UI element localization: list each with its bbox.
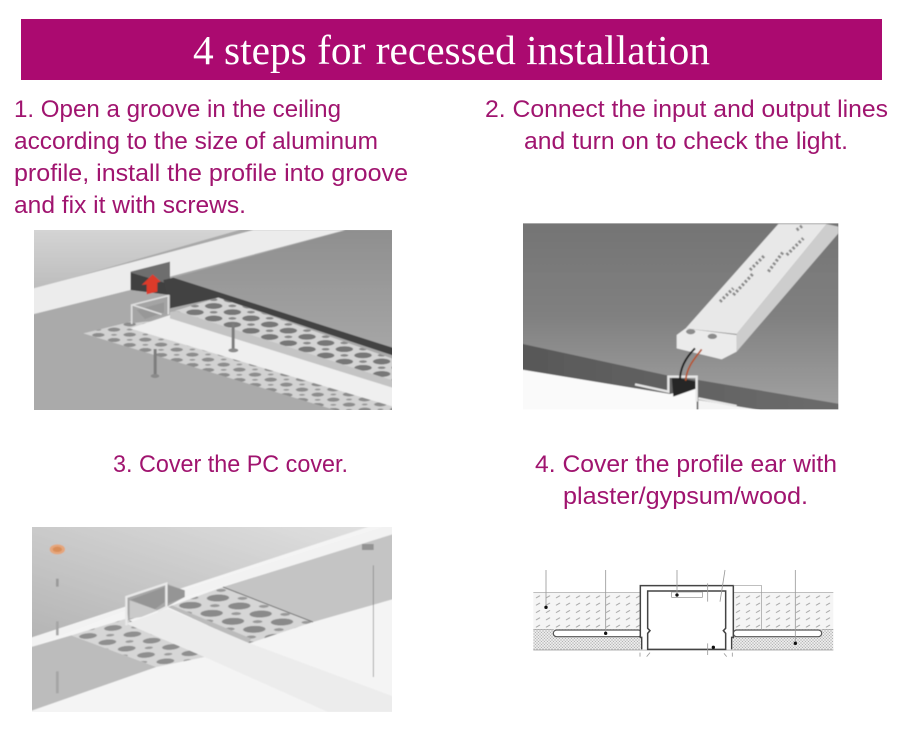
step 1 text [14, 96, 408, 219]
step 2 illustration [520, 220, 840, 413]
step 1 text: according to the size of aluminum [14, 128, 378, 155]
step 1 text: profile, install the profile into groove [14, 160, 408, 187]
step 2 text: and turn on to check the light. [524, 128, 848, 155]
step 1 illustration [30, 225, 397, 415]
step 4 text [535, 451, 837, 510]
step 3 text: 3. Cover the PC cover. [113, 451, 348, 478]
title: 4 steps for recessed installation [193, 27, 710, 73]
step 2 text: 2. Connect the input and output lines [485, 96, 888, 123]
step 1 text: 1. Open a groove in the ceiling [14, 96, 341, 123]
step 3 illustration [28, 522, 395, 715]
step 4 section diagram [533, 570, 833, 657]
step 4 text: plaster/gypsum/wood. [563, 483, 808, 510]
title banner [21, 19, 882, 80]
step 4 text: 4. Cover the profile ear with [535, 451, 837, 478]
step 2 text [485, 96, 888, 155]
step 1 text: and fix it with screws. [14, 192, 246, 219]
